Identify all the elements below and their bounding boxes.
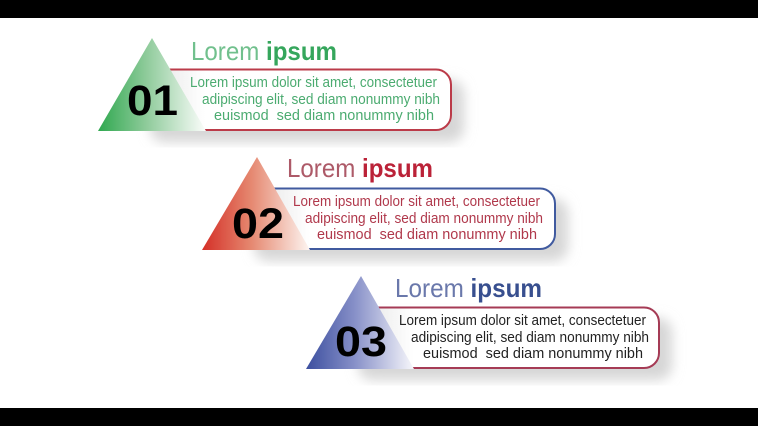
top black bar <box>0 0 758 18</box>
panel: step 01 <box>98 36 464 142</box>
rounded box 03 <box>374 308 659 368</box>
number 01: 01 <box>127 77 178 125</box>
box shadow 03 <box>358 318 672 380</box>
body text 01 <box>190 74 440 124</box>
number 03: 03 <box>335 318 387 366</box>
heading 02: Lorem ipsum <box>287 153 433 183</box>
triangle 01 <box>98 38 206 131</box>
body text 01: adipiscing elit, sed diam nonummy nibh <box>202 91 440 108</box>
rounded box 01 <box>165 70 451 130</box>
body text 03 <box>399 312 649 362</box>
panel: step 02 <box>202 153 568 261</box>
heading 01: Lorem ipsum <box>191 36 337 66</box>
rounded box 02 <box>270 188 555 249</box>
number 02: 02 <box>232 200 284 248</box>
body text 02 <box>293 193 543 243</box>
triangle 03 <box>306 276 414 369</box>
triangle 02 <box>202 157 310 250</box>
panel: step 03 <box>306 273 672 380</box>
body text 01: Lorem ipsum dolor sit amet, consectetuer <box>190 74 437 91</box>
heading 03: Lorem ipsum <box>395 273 542 303</box>
body text 03: adipiscing elit, sed diam nonummy nibh <box>411 329 649 346</box>
body text 02: adipiscing elit, sed diam nonummy nibh <box>305 210 543 227</box>
body text 02: euismod sed diam nonummy nibh <box>317 226 537 243</box>
body text 03: euismod sed diam nonummy nibh <box>423 345 643 362</box>
box shadow 02 <box>254 199 568 261</box>
bottom black bar <box>0 408 758 426</box>
box shadow 01 <box>150 80 464 142</box>
body text 01: euismod sed diam nonummy nibh <box>214 107 434 124</box>
body text 02: Lorem ipsum dolor sit amet, consectetuer <box>293 193 540 210</box>
body text 03: Lorem ipsum dolor sit amet, consectetuer <box>399 312 646 329</box>
